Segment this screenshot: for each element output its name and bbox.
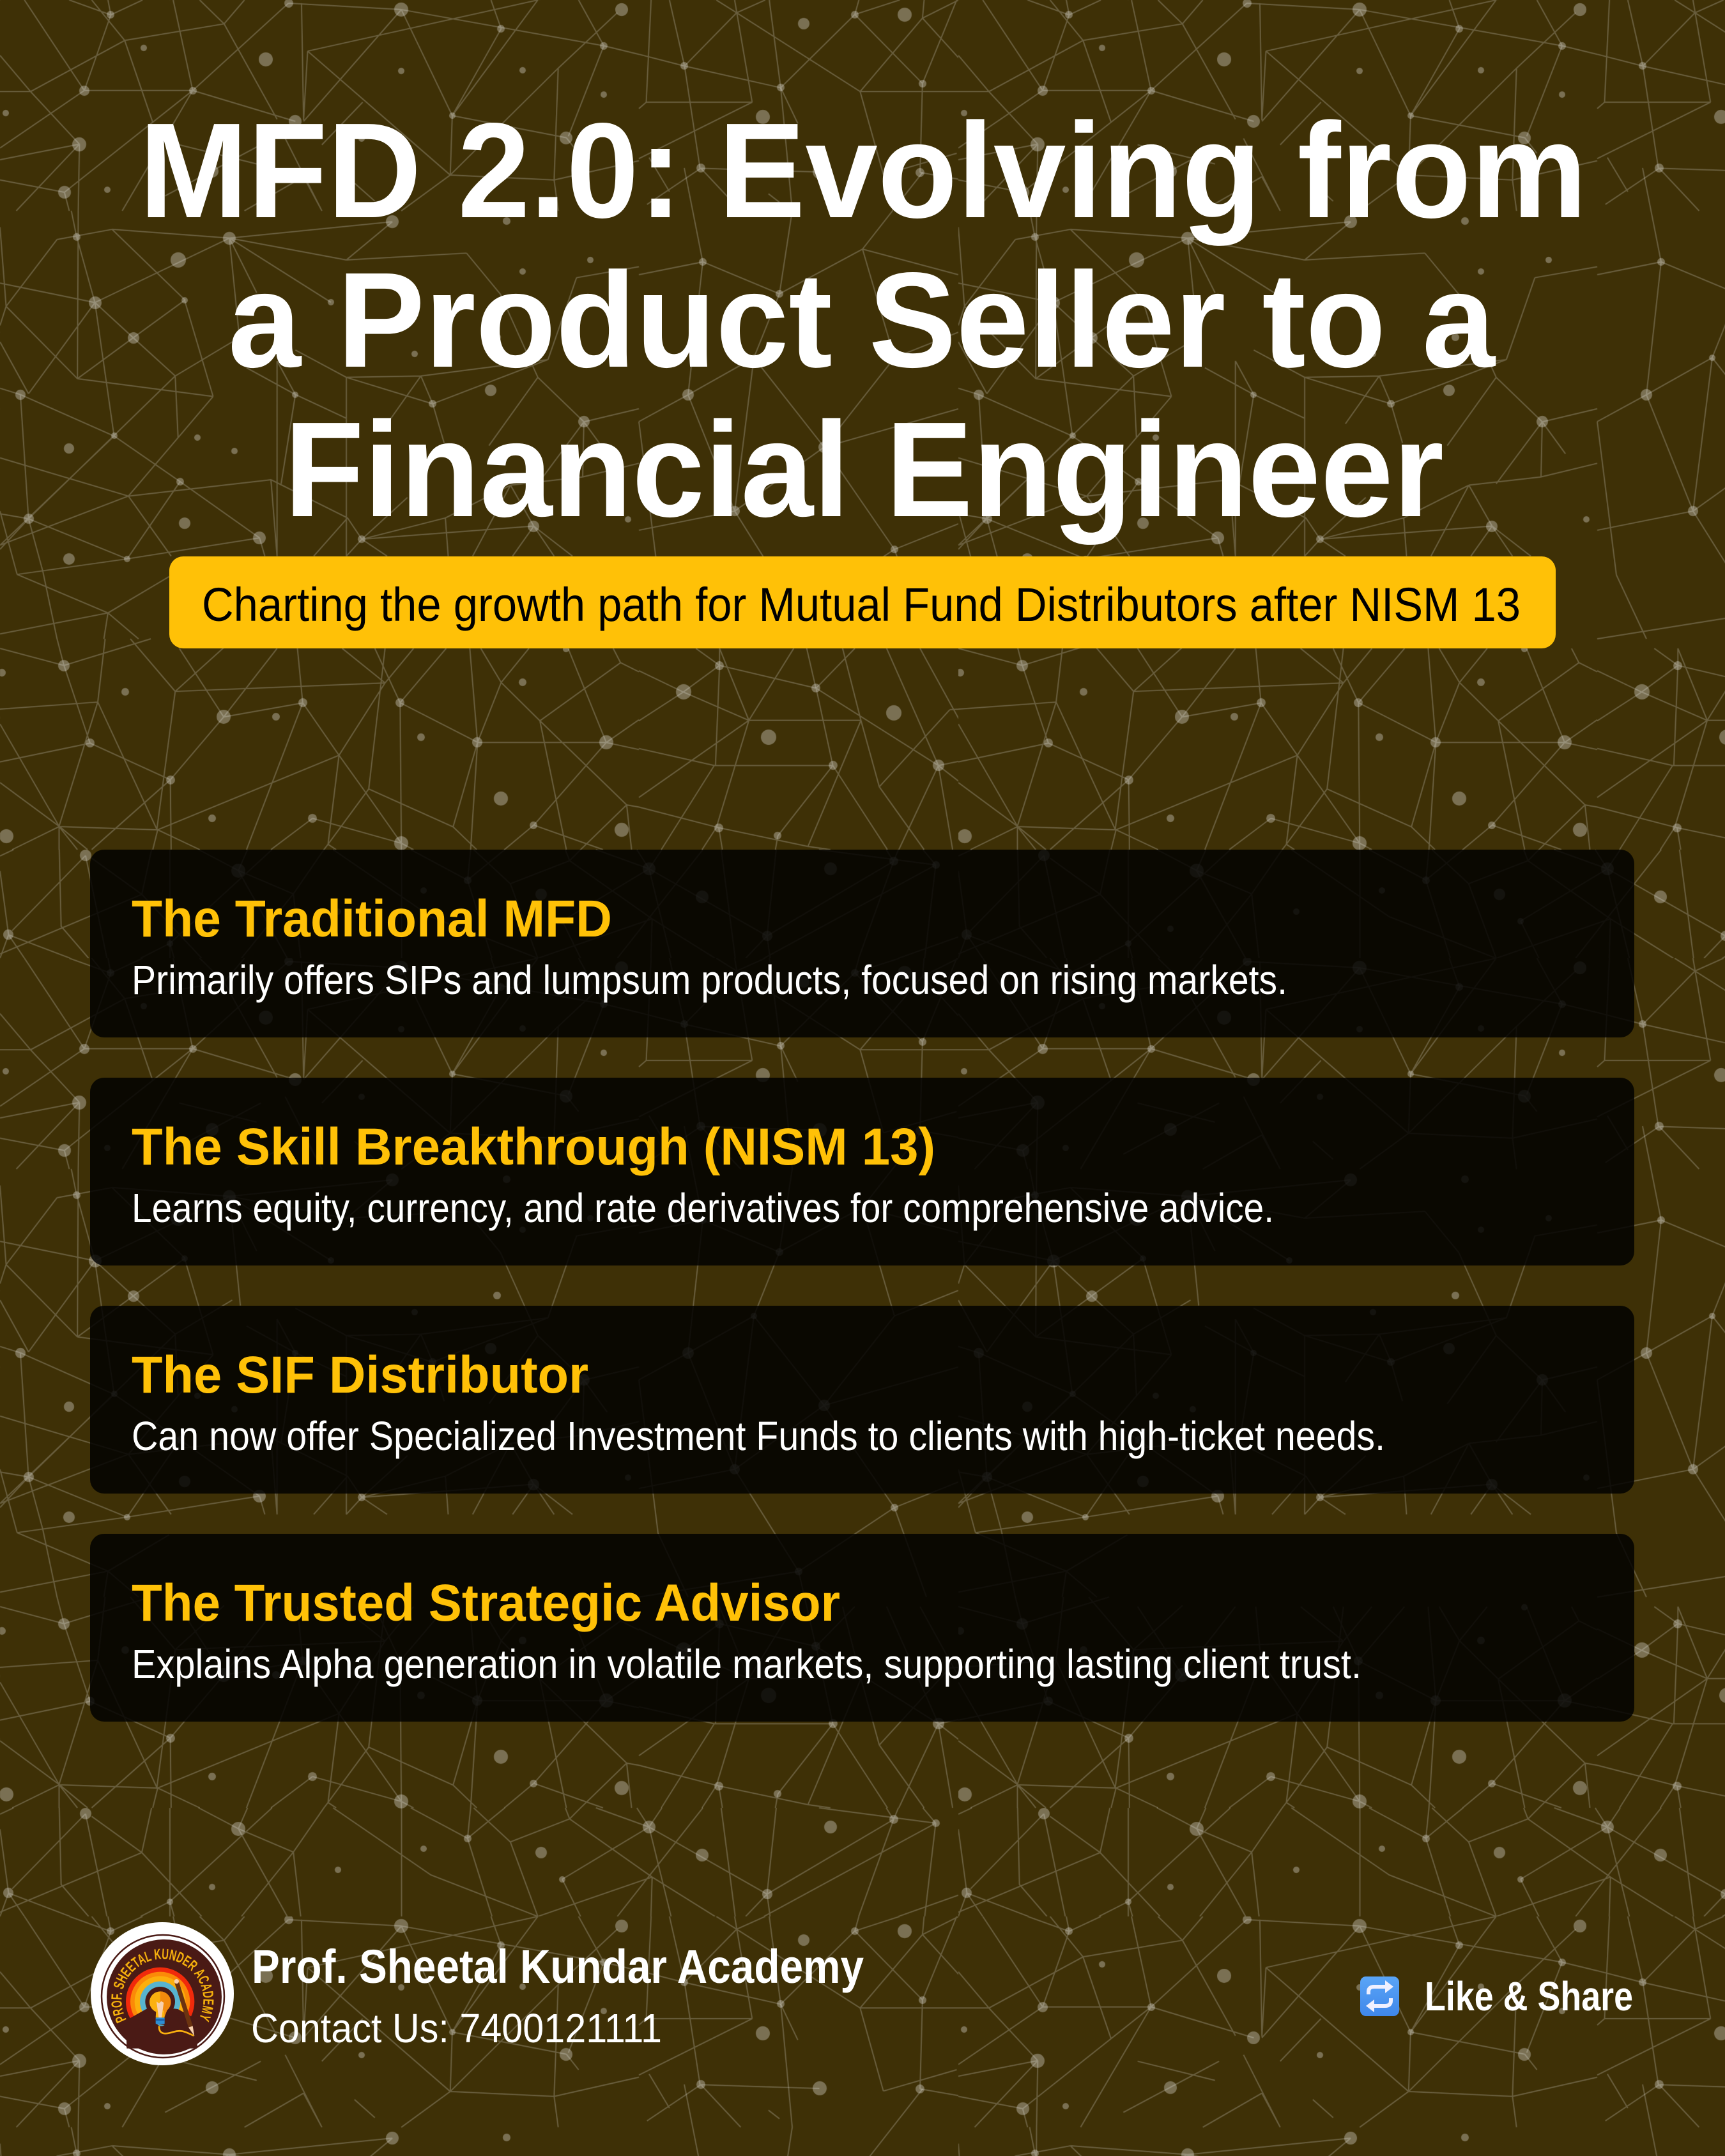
subtitle banner (169, 556, 1556, 648)
title: MFD 2.0: Evolving from (139, 95, 1587, 246)
icon: academy logo (91, 1922, 234, 2065)
panel: The Skill Breakthrough (90, 1078, 1634, 1265)
panel: The Trusted Strategic Advisor (90, 1534, 1634, 1722)
title (139, 95, 1587, 545)
academy name: Prof. Sheetal Kundar Academy (252, 1940, 864, 1993)
contact line: Contact Us: 7400121111 (251, 2005, 662, 2051)
subtitle banner: Charting the growth path for Mutual Fund Distributors after NISM 13 (202, 578, 1521, 631)
icon: academy logo: PROF. SHEETAL KUNDER ACADEMY (111, 1948, 213, 2024)
panel: The Skill Breakthrough: The Skill Breakthrough (NISM 13) (132, 1118, 935, 1176)
panel: The SIF Distributor (90, 1306, 1634, 1494)
panel: The Traditional MFD: The Traditional MFD (132, 890, 612, 948)
panel: The SIF Distributor: Can now offer Specialized Investment Funds to clients with high-ticket needs. (132, 1413, 1385, 1459)
title: Financial Engineer (284, 394, 1444, 545)
panel: The Traditional MFD: Primarily offers SIPs and lumpsum products, focused on rising markets. (132, 957, 1287, 1003)
panel: The Skill Breakthrough: Learns equity, currency, and rate derivatives for comprehensive advice. (132, 1185, 1274, 1231)
panel: The SIF Distributor: The SIF Distributor (132, 1346, 588, 1404)
panel: The Trusted Strategic Advisor: Explains Alpha generation in volatile markets, supporting lasting client trust. (132, 1641, 1361, 1687)
panel: The Trusted Strategic Advisor: The Trusted Strategic Advisor (132, 1574, 840, 1632)
title: a Product Seller to a (228, 244, 1496, 395)
panel: The Traditional MFD (90, 850, 1634, 1037)
like and share label: Like & Share (1425, 1973, 1633, 2019)
icon: share arrows (1360, 1976, 1399, 2016)
